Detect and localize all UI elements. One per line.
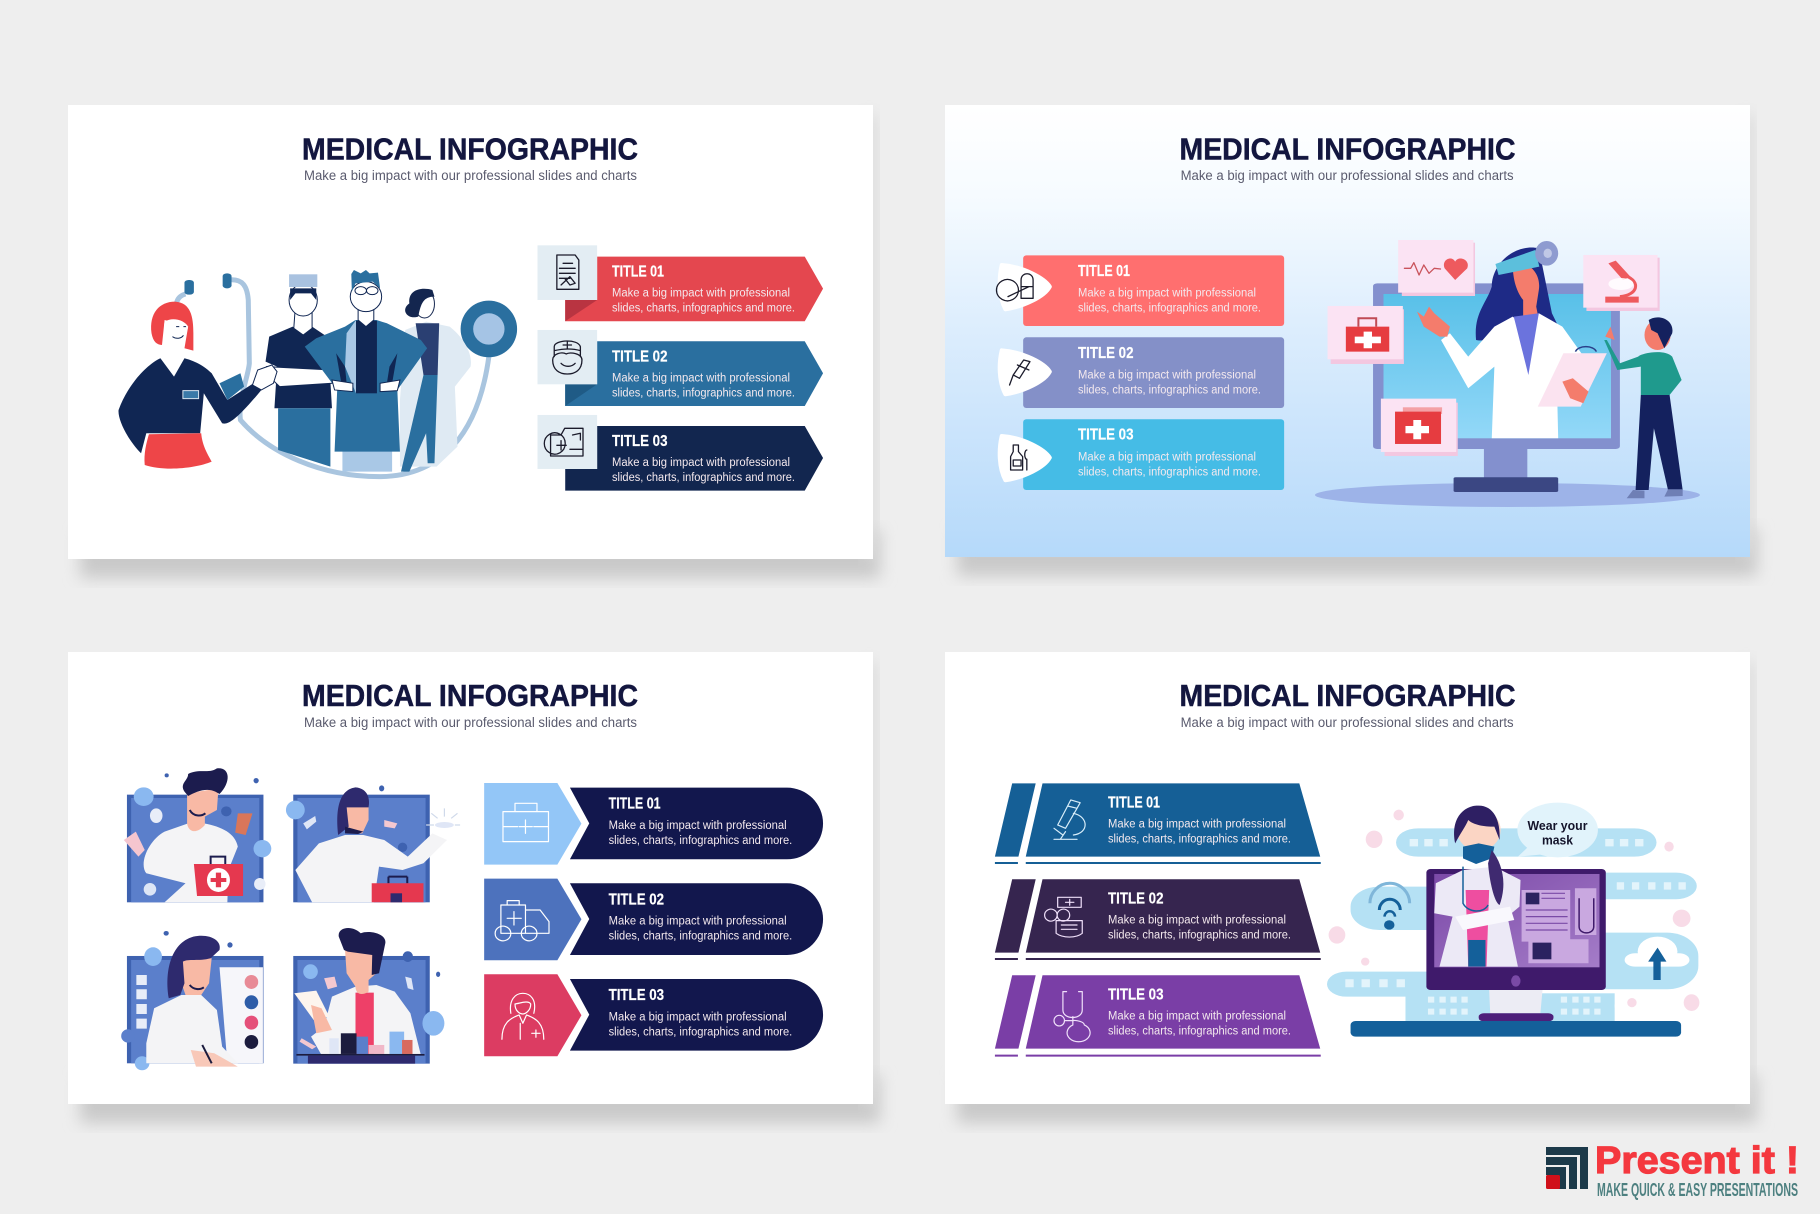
body 02: Make a big impact with professional [1078, 369, 1256, 381]
row: title 02: slides, charts, infographics and more. [1108, 929, 1291, 941]
subtitle: Make a big impact with our professional slides and charts [304, 168, 637, 183]
body 01: Make a big impact with professional [1078, 288, 1256, 300]
body 01: Make a big impact with professional [609, 820, 787, 832]
shapes 03 [484, 974, 823, 1056]
panel: doctor on monitor slide [945, 105, 1757, 576]
illustration: medical team with stethoscope [119, 270, 517, 477]
body 03: Make a big impact with professional [1108, 1010, 1286, 1022]
row: title 01: slides, charts, infographics and more. [609, 835, 792, 847]
label 03: TITLE 03 [612, 433, 668, 450]
icon: dropper [1010, 360, 1030, 385]
subtitle: Make a big impact with our professional slides and charts [304, 715, 637, 730]
shapes 03 [995, 975, 1321, 1057]
shapes 01 [995, 783, 1321, 864]
panel: medical team slide [68, 105, 880, 578]
label 02: TITLE 02 [1078, 345, 1134, 362]
row: title 03 [537, 415, 823, 491]
label 01: TITLE 01 [1108, 794, 1160, 811]
illustration: doctor on monitor [1315, 240, 1700, 507]
body 01: Make a big impact with professional [612, 288, 790, 300]
row: title 01: slides, charts, infographics and more. [612, 303, 795, 315]
logo: Present it! [1546, 1140, 1799, 1200]
row: title 01 [484, 783, 823, 865]
row: title 02 [537, 330, 823, 406]
subtitle: Make a big impact with our professional slides and charts [1181, 715, 1514, 730]
body 03: Make a big impact with professional [612, 457, 790, 469]
row: title 03: slides, charts, infographics and more. [612, 472, 795, 484]
row: title 01: slides, charts, infographics and more. [1078, 303, 1261, 315]
row: title 01: slides, charts, infographics and more. [1108, 833, 1291, 845]
callout: wear your mask: Wear your [1528, 818, 1588, 833]
label 02: TITLE 02 [612, 348, 668, 365]
row: title 02 [1000, 337, 1284, 408]
icon: document [557, 255, 579, 289]
row: title 02 [484, 879, 823, 960]
label 03: TITLE 03 [1108, 986, 1164, 1003]
row: title 01 [995, 783, 1321, 864]
ribbon 02 [537, 330, 823, 406]
body 01: Make a big impact with professional [1108, 818, 1286, 830]
shapes 02 [995, 879, 1321, 960]
title: MEDICAL INFOGRAPHIC [1180, 679, 1516, 713]
title: MEDICAL INFOGRAPHIC [1180, 132, 1516, 166]
body 02: Make a big impact with professional [612, 372, 790, 384]
label 01: TITLE 01 [609, 796, 661, 813]
shapes 02 [484, 879, 823, 960]
ribbon 01 [537, 245, 823, 321]
icon: medical folder [544, 428, 583, 456]
row: title 03 [484, 974, 823, 1056]
row: title 03 [995, 975, 1321, 1057]
row: title 02 [995, 879, 1321, 960]
logo mark [1546, 1147, 1588, 1189]
body 02: Make a big impact with professional [609, 916, 787, 928]
row: title 02: slides, charts, infographics and more. [609, 931, 792, 943]
row: title 03: slides, charts, infographics and more. [1108, 1025, 1291, 1037]
row: title 02: slides, charts, infographics and more. [1078, 384, 1261, 396]
row: title 03 [1000, 419, 1284, 490]
row: title 02: slides, charts, infographics and more. [612, 387, 795, 399]
icon: microscope [1054, 800, 1085, 839]
icon: ambulance [495, 901, 549, 941]
row: title 01 [537, 245, 823, 321]
illustration: doctor with medicine bottles [293, 928, 444, 1064]
bar 01 [1000, 255, 1284, 326]
icon: medicine bottle and spoon [1011, 445, 1027, 470]
row: title 03: slides, charts, infographics and more. [1078, 466, 1261, 478]
callout: wear your mask [1528, 818, 1588, 848]
icon: medical bag [503, 803, 548, 842]
row: title 03: slides, charts, infographics and more. [609, 1026, 792, 1038]
icon: nurse [553, 341, 582, 374]
icon: surgeon with mask [1045, 897, 1082, 937]
label 01: TITLE 01 [1078, 263, 1130, 280]
icon: stethoscope [1054, 992, 1090, 1042]
body 02: Make a big impact with professional [1108, 914, 1286, 926]
icon: pills [996, 274, 1033, 301]
illustration: woman with checklist [121, 931, 263, 1070]
panel: wear your mask slide [945, 652, 1757, 1123]
logo wordmark: Present it ! [1595, 1140, 1799, 1182]
callout: wear your mask: mask [1542, 832, 1574, 848]
label 03: TITLE 03 [609, 987, 664, 1004]
label 02: TITLE 02 [609, 891, 664, 908]
body 03: Make a big impact with professional [609, 1011, 787, 1023]
row: title 01 [996, 255, 1284, 326]
label 03: TITLE 03 [1078, 427, 1134, 444]
title: MEDICAL INFOGRAPHIC [302, 679, 638, 713]
shapes 01 [484, 783, 823, 865]
label 01: TITLE 01 [612, 264, 664, 281]
bar 02 [1000, 337, 1284, 408]
icon: female doctor [502, 993, 544, 1039]
panel: healthcare workers slide [68, 652, 880, 1123]
subtitle: Make a big impact with our professional slides and charts [1181, 168, 1514, 183]
bar 03 [1000, 419, 1284, 490]
ribbon 03 [537, 415, 823, 491]
label 02: TITLE 02 [1108, 890, 1164, 907]
title: MEDICAL INFOGRAPHIC [302, 132, 638, 166]
illustration: masked doctor on monitor [1327, 803, 1699, 1037]
body 03: Make a big impact with professional [1078, 451, 1256, 463]
illustration: man with first-aid kit [124, 768, 271, 902]
illustration: woman holding pill [286, 785, 460, 902]
